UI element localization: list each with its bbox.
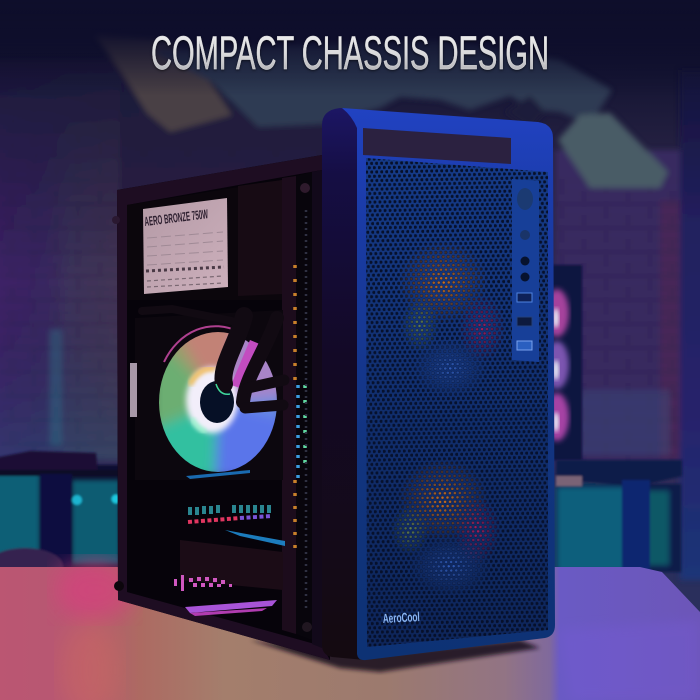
divider rail [282, 176, 296, 634]
hex shadow notch [505, 96, 545, 128]
power supply label: AERO BRONZE 750W [144, 206, 209, 229]
rear bracket plate [180, 540, 283, 590]
top of gpu glow [186, 470, 250, 479]
fan hub [200, 381, 234, 423]
tube highlight pink [231, 340, 262, 388]
far right pillar [680, 70, 700, 580]
rgb fan [159, 332, 277, 472]
panel: open side of chassis [112, 155, 330, 660]
fan [130, 309, 290, 480]
fan frame [135, 310, 283, 480]
audio jacks [520, 256, 530, 266]
mounting screws [300, 183, 310, 193]
right monitor [545, 265, 582, 460]
power button [517, 188, 533, 210]
io panel [512, 179, 539, 362]
hex orange [95, 35, 232, 132]
hex teal [150, 40, 612, 127]
background teal glow and desks [0, 451, 682, 584]
front edge [322, 108, 365, 660]
usb ports [517, 293, 532, 302]
top fade [0, 0, 700, 95]
table [0, 560, 700, 700]
fan rim [164, 326, 239, 362]
brick wall right [555, 150, 685, 470]
reset button [520, 230, 530, 240]
panel: front panel [322, 108, 555, 660]
front face [342, 108, 555, 660]
hexagon wall lights [95, 35, 668, 188]
interior upper bay [127, 180, 282, 300]
hex lower right [558, 113, 668, 188]
brick wall left [0, 60, 330, 460]
pc case [112, 108, 555, 660]
case shadow [250, 640, 540, 672]
side led strip [295, 210, 306, 610]
barcode sticker [130, 363, 137, 417]
handle cutout [363, 128, 511, 164]
tube fitting glow [216, 384, 230, 394]
lower drive cage [174, 575, 277, 616]
water cooling tubes [142, 309, 284, 408]
brand logo: AeroCool [382, 609, 420, 626]
mesh grille [366, 158, 548, 647]
power supply label [143, 198, 228, 294]
pcie slots [188, 505, 285, 546]
chassis side frame [117, 155, 330, 660]
fan glow dots [392, 242, 504, 594]
fan bright inner ring [186, 367, 238, 433]
